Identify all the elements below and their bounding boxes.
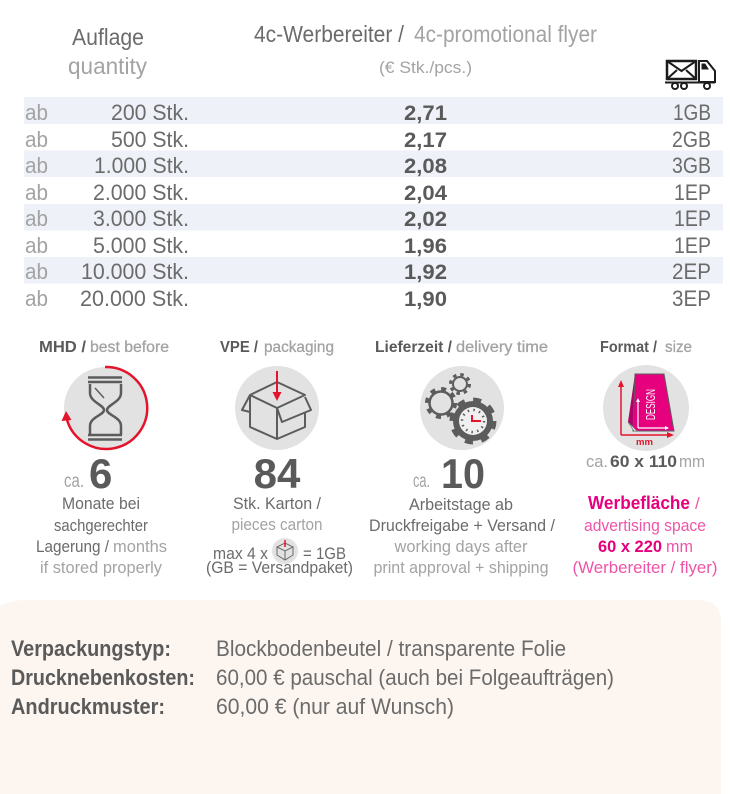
row: 10.000	[25, 259, 711, 284]
row: 500	[25, 127, 711, 152]
row: 200: 1GB	[673, 100, 711, 125]
row: 20.000: 20.000 Stk.	[80, 286, 189, 311]
table header: product title: 4c-promotional flyer	[414, 21, 597, 47]
icon: hourglass with red arrow	[62, 367, 147, 449]
table header: quantity: quantity	[68, 53, 147, 79]
heading: Format: size	[665, 339, 692, 356]
shelf life text: if stored properly	[40, 558, 162, 577]
delivery text: Druckfreigabe + Versand /	[369, 516, 555, 535]
icon: mail truck	[665, 61, 715, 89]
panel: size	[572, 339, 718, 577]
row: 3.000: 1EP	[674, 206, 711, 231]
icon: gears with clock	[420, 366, 504, 450]
delivery value: 10	[441, 450, 485, 497]
row: 2.000: 2.000 Stk.	[93, 180, 189, 205]
packaging text: = 1GB	[303, 544, 346, 563]
row: 500: 2,17	[404, 129, 447, 152]
heading: MHD: best before	[90, 339, 169, 356]
price table	[24, 97, 723, 311]
detail: proof sample: 60,00 € (nur auf Wunsch)	[216, 694, 454, 719]
delivery value: ca.	[413, 471, 430, 492]
icon: open box with red arrow	[235, 366, 319, 450]
row: 1.000: 2,08	[404, 155, 447, 178]
detail: packaging type: Verpackungstyp:	[11, 636, 171, 661]
row: 2.000: 1EP	[674, 180, 711, 205]
row: 500: 500 Stk.	[111, 127, 189, 152]
shelf life value	[64, 450, 112, 497]
delivery text: print approval + shipping	[374, 558, 548, 577]
heading: Format	[600, 339, 692, 356]
detail: packaging type	[11, 636, 566, 661]
heading: MHD: MHD /	[39, 339, 87, 356]
heading: Format: Format /	[600, 339, 657, 356]
advertising space text: /	[695, 494, 700, 513]
format size: mm	[679, 452, 705, 471]
delivery text	[369, 495, 555, 577]
advertising space text: (Werbereiter / flyer)	[572, 558, 718, 577]
row: 10.000: ab	[25, 259, 48, 284]
table header: quantity	[68, 24, 147, 79]
heading: VPE: packaging	[264, 339, 334, 356]
row: 3.000	[25, 206, 711, 231]
row: 10.000: 2EP	[672, 259, 711, 284]
row: 3.000: ab	[25, 206, 48, 231]
row: 5.000: 1EP	[674, 233, 711, 258]
heading: VPE: VPE /	[220, 339, 259, 356]
icon: flyer format	[603, 365, 689, 451]
shelf life text: sachgerechter	[54, 516, 148, 535]
row: 2.000: 2,04	[404, 182, 447, 205]
panel: delivery time	[369, 339, 555, 577]
row: 3.000: 2,02	[404, 208, 447, 231]
detail: additional printing costs: 60,00 € pauschal (auch bei Folgeaufträgen)	[216, 665, 614, 690]
delivery value	[413, 450, 485, 497]
row: 10.000: 1,92	[404, 261, 447, 284]
row: 1.000: ab	[25, 153, 48, 178]
row: 200: ab	[25, 100, 48, 125]
row: 200: 200 Stk.	[111, 100, 189, 125]
panel: best before	[36, 339, 169, 577]
row: 20.000: 3EP	[672, 286, 711, 311]
advertising space text	[572, 493, 718, 577]
shelf life text	[36, 494, 167, 577]
heading: Lieferzeit: Lieferzeit /	[375, 339, 453, 356]
format size: 60 x 110	[610, 452, 677, 471]
packaging text: max 4 x	[213, 544, 268, 563]
shelf life text: Monate bei	[62, 494, 140, 513]
delivery text: Arbeitstage ab	[409, 495, 513, 514]
row: 2.000: ab	[25, 180, 48, 205]
row: 20.000	[25, 286, 711, 311]
packaging value: 84	[254, 450, 301, 497]
row: 5.000	[25, 233, 711, 258]
icon: small box	[272, 538, 298, 564]
panel: additional details	[0, 600, 721, 794]
advertising space text: 60 x 220	[598, 537, 662, 556]
row: 1.000	[25, 153, 711, 178]
detail: proof sample	[11, 694, 454, 719]
row: 5.000: ab	[25, 233, 48, 258]
format size	[586, 452, 705, 471]
row: 1.000: 1.000 Stk.	[94, 153, 189, 178]
row: 20.000: 1,90	[404, 288, 447, 311]
shelf life value: 6	[89, 450, 112, 497]
advertising space text: mm	[666, 537, 693, 556]
row: 5.000: 1,96	[404, 235, 447, 258]
row: 500: ab	[25, 127, 48, 152]
heading: VPE	[220, 339, 334, 356]
heading: MHD	[39, 339, 169, 356]
detail: proof sample: Andruckmuster:	[11, 694, 165, 719]
table header: product title: (€ Stk./pcs.)	[379, 58, 472, 77]
row: 1.000: 3GB	[672, 153, 711, 178]
packaging text: Stk. Karton /	[233, 494, 321, 513]
row: 500: 2GB	[672, 127, 711, 152]
shelf life value: ca.	[64, 471, 84, 492]
format size: ca.	[586, 452, 608, 471]
row: 10.000: 10.000 Stk.	[81, 259, 189, 284]
shelf life text: months	[113, 537, 167, 556]
advertising space text: advertising space	[584, 516, 706, 535]
icon: flyer format: mm	[636, 437, 653, 448]
icon: flyer format: DESIGN	[643, 389, 658, 420]
heading: Lieferzeit: delivery time	[456, 339, 548, 356]
packaging text	[206, 494, 353, 577]
packaging text: pieces carton	[232, 515, 322, 534]
panel: packaging	[206, 339, 353, 577]
advertising space text: Werbefläche	[588, 493, 690, 513]
row: 200: 2,71	[404, 102, 447, 125]
table header: product title	[254, 21, 597, 77]
heading: Lieferzeit	[375, 339, 548, 356]
delivery text: working days after	[394, 537, 528, 556]
detail: additional printing costs	[11, 665, 614, 690]
row: 3.000: 3.000 Stk.	[93, 206, 189, 231]
row: 2.000	[25, 180, 711, 205]
row: 20.000: ab	[25, 286, 48, 311]
detail: additional printing costs: Drucknebenkosten:	[11, 665, 195, 690]
table header: product title: 4c-Werbereiter /	[254, 21, 405, 47]
table header: quantity: Auflage	[72, 24, 144, 50]
row: 200	[25, 100, 711, 125]
detail: packaging type: Blockbodenbeutel / transparente Folie	[216, 636, 566, 661]
row: 5.000: 5.000 Stk.	[93, 233, 189, 258]
shelf life text: Lagerung /	[36, 537, 109, 556]
packaging text: (GB = Versandpaket)	[206, 558, 353, 577]
